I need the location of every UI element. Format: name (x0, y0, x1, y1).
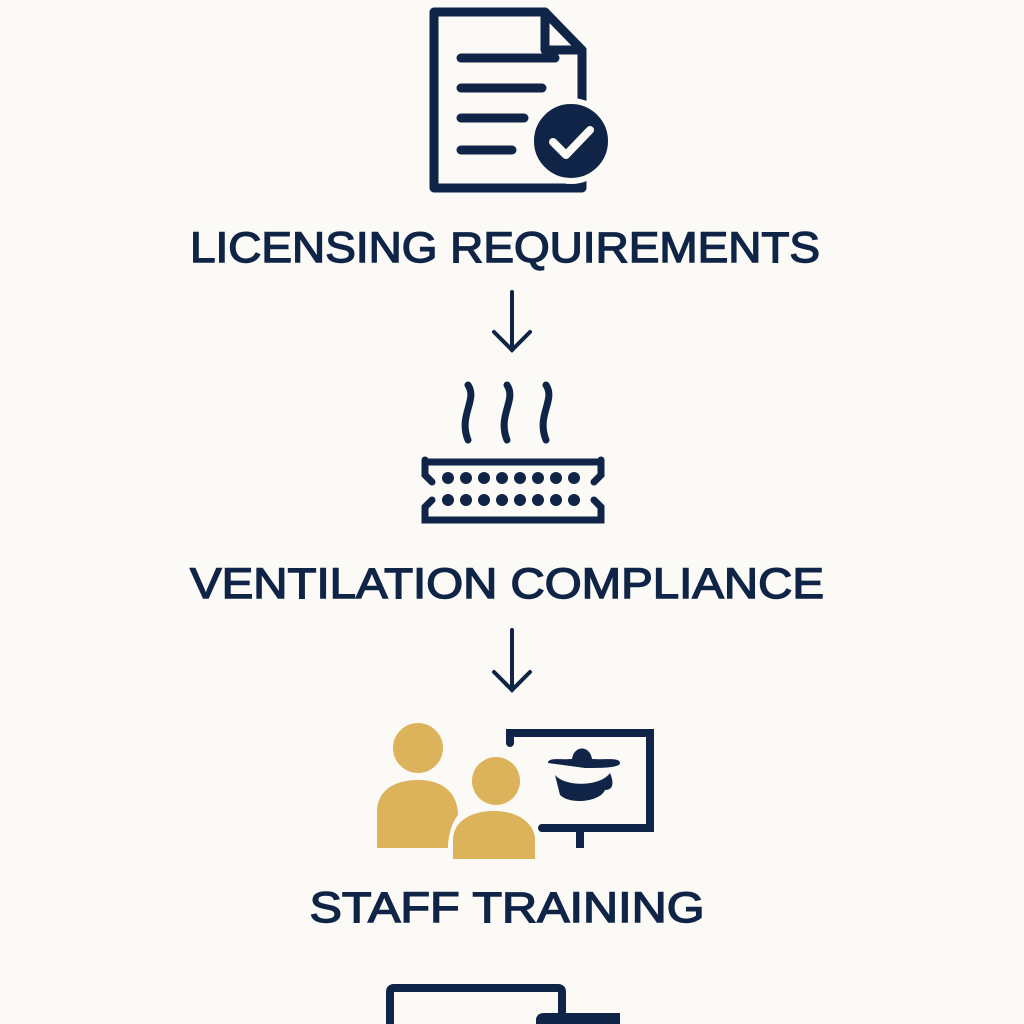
icon: ventilation hood (425, 385, 601, 520)
arrow 2 (494, 630, 530, 690)
icon: staff training (377, 723, 650, 859)
arrow 1 (494, 292, 530, 350)
heading: licensing requirements: LICENSING REQUIREMENTS (190, 224, 820, 272)
icon: license document with check (434, 12, 611, 188)
icon: partial next step (390, 988, 616, 1024)
heading: staff training: STAFF TRAINING (310, 884, 704, 932)
heading: ventilation compliance: VENTILATION COMPLIANCE (190, 560, 824, 608)
